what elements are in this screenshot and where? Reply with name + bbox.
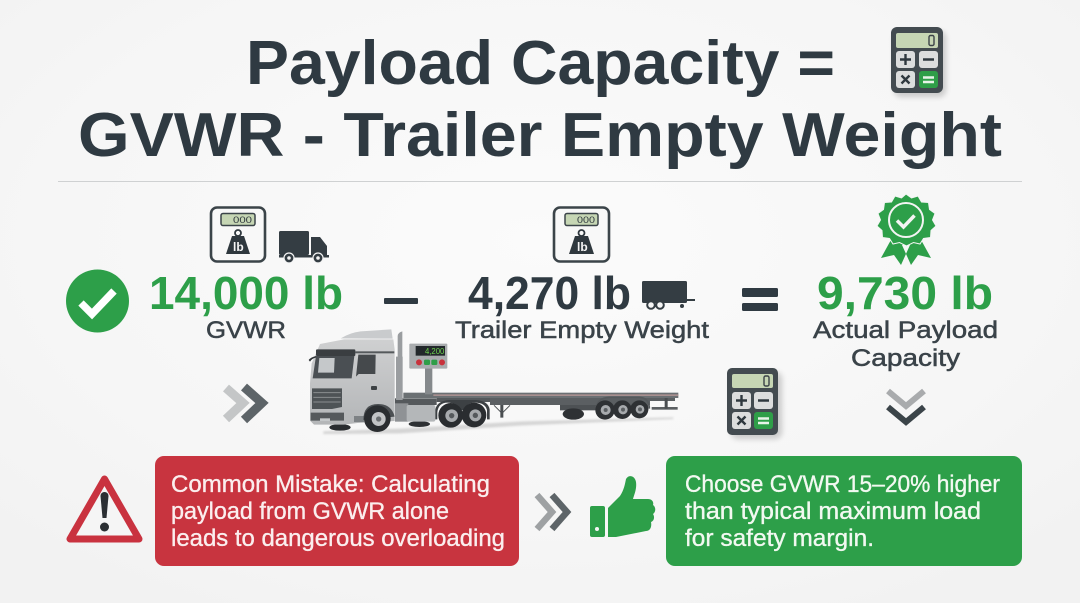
value: 9,730 lb: 9,730 lb <box>817 267 993 319</box>
icon: calculator top <box>891 27 946 97</box>
operator: equals <box>742 288 778 311</box>
label: Actual Payload Capacity <box>813 317 998 372</box>
icon: scale with weight, GVWR: 000 <box>233 215 252 225</box>
tractor chassis and drive wheels <box>395 398 490 428</box>
scale display post: 4,200 <box>425 347 445 356</box>
label: Trailer Empty Weight: Trailer Empty Weight <box>455 317 709 344</box>
value: 4,270 lb: 4,270 lb <box>468 267 631 319</box>
divider <box>58 181 1022 182</box>
panel: recommendation: Choose GVWR 15–20% higher <box>685 471 1000 498</box>
trailer deck <box>403 393 678 418</box>
panel: common mistake: leads to dangerous overloading <box>171 525 505 552</box>
icon: scale with weight, trailer <box>554 208 609 262</box>
icon: chevrons between panels <box>537 495 567 529</box>
operator: minus <box>384 298 418 304</box>
icon: trailer <box>642 281 695 309</box>
panel: recommendation: for safety margin. <box>685 525 874 552</box>
icon: chevrons right <box>226 387 262 420</box>
icon: green award ribbon <box>877 194 936 265</box>
icon: truck <box>279 231 329 263</box>
exhaust stack <box>396 331 403 400</box>
panel: recommendation: than typical maximum load <box>685 498 981 525</box>
trailer wheels <box>563 397 649 420</box>
illustration: flatbed truck with scale <box>309 329 678 434</box>
value: 14,000 lb: 14,000 lb <box>149 267 343 319</box>
icon: scale with weight, GVWR: lb <box>233 240 244 254</box>
icon: green check circle <box>66 270 129 332</box>
title <box>78 29 1002 170</box>
ground shadow <box>323 417 673 434</box>
title: GVWR - Trailer Empty Weight <box>78 101 1002 170</box>
label: Actual Payload Capacity: Capacity <box>851 345 960 372</box>
icon: scale with weight, GVWR <box>211 208 265 262</box>
panel: common mistake: payload from GVWR alone <box>171 498 449 525</box>
icon: thumbs up <box>590 476 655 537</box>
icon: scale with weight, trailer: lb <box>577 240 588 254</box>
panel: recommendation <box>666 456 1022 566</box>
panel: common mistake <box>155 456 519 566</box>
icon: calculator lower <box>727 368 782 439</box>
label: Actual Payload Capacity: Actual Payload <box>813 317 998 344</box>
scale display post <box>409 344 447 394</box>
icon: chevrons down <box>888 391 924 422</box>
icon: warning triangle <box>70 479 139 539</box>
panel: common mistake: Common Mistake: Calculating <box>171 471 490 498</box>
icon: scale with weight, trailer: 000 <box>577 215 595 225</box>
label: GVWR: GVWR <box>206 317 286 344</box>
cab <box>309 329 395 432</box>
title: Payload Capacity = <box>246 29 835 98</box>
